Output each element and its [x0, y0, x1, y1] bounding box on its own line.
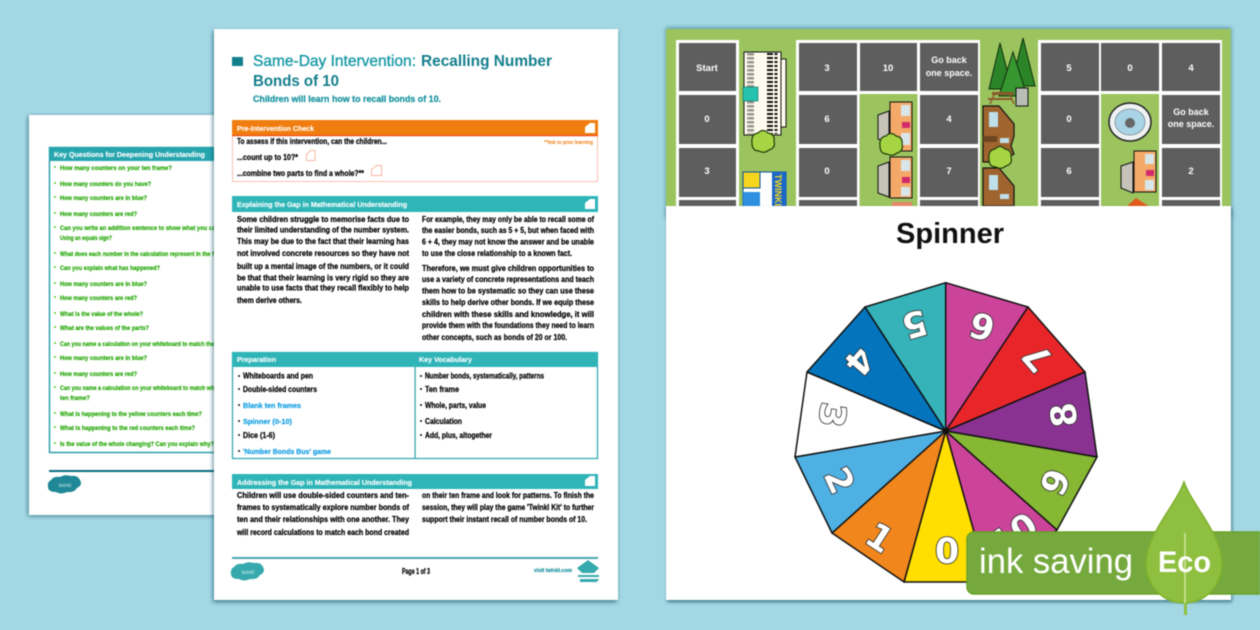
icon: twinkl shop — [743, 172, 786, 209]
key questions list: What is happening to the yellow counters each time? — [60, 411, 202, 418]
panel: preparation and key vocabulary table: Key Vocabulary — [419, 355, 473, 364]
key questions list: How many counters on your ten frame? — [60, 165, 172, 172]
spinner wheel — [795, 283, 1097, 582]
board cell labels: 2 — [1188, 166, 1194, 177]
front page footer: twinkl — [242, 570, 254, 576]
preparation list: Double-sided counters — [243, 385, 318, 394]
vocabulary list — [420, 372, 545, 440]
board cell labels: 5 — [1066, 63, 1072, 74]
panel: pre-intervention check: Pre-Intervention Check — [237, 124, 315, 133]
board cell labels: 6 — [824, 114, 830, 125]
board track strips — [676, 40, 1222, 214]
board cell labels: 3 — [824, 63, 830, 74]
back page footer: twinkl — [59, 483, 71, 489]
panel: pre-intervention check: ...count up to 10?* — [237, 153, 299, 162]
explaining text right column: use a variety of concrete representations and teach — [422, 275, 594, 284]
key questions box: Key Questions for Deepening Understanding — [54, 150, 205, 159]
panel: preparation and key vocabulary table: Preparation — [237, 355, 276, 364]
panel: board game sheet — [666, 29, 1231, 219]
explaining text left column: their limited understanding of the number system. — [237, 226, 409, 234]
page heading: Recalling Number — [421, 53, 552, 70]
key questions list: What is happening to the red counters each time? — [60, 425, 195, 432]
explaining text left column: them derive others. — [237, 296, 302, 305]
preparation list: Dice (1-6) — [243, 431, 275, 440]
key questions list: How many counters are in blue? — [60, 281, 147, 288]
board cell labels: 0 — [704, 114, 710, 125]
explaining text right column: the easier bonds, such as 5 + 5, but when faced with — [422, 226, 594, 235]
key questions list: How many counters are in blue? — [60, 355, 147, 362]
key questions list: How many counters are in blue? — [60, 195, 147, 202]
spinner numbers: 8 — [1043, 400, 1086, 430]
preparation list: Spinner (0-10) — [243, 417, 293, 426]
preparation list — [238, 372, 331, 456]
key questions list: Using an equals sign? — [60, 235, 112, 242]
vocabulary list: Whole, parts, value — [425, 401, 487, 410]
panel: addressing the gap: session, they will play the game 'Twinkl Kit' to further — [422, 503, 594, 512]
panel: addressing the gap: Addressing the Gap in Mathematical Understanding — [237, 478, 412, 487]
explaining text left column: This may be due to the fact that their learning has — [237, 237, 410, 246]
key questions list: What is the value of the whole? — [60, 311, 143, 318]
icon: twinkl shop: TWINKL — [773, 174, 783, 209]
icon: fountain — [1109, 103, 1151, 141]
icon: orange house — [1121, 151, 1156, 207]
explaining text left column — [237, 215, 410, 305]
page heading: Children will learn how to recall bonds of 10. — [253, 94, 441, 104]
explaining text right column: other concepts, such as bonds of 20 or 100. — [422, 333, 567, 342]
explaining text right column: For example, they may only be able to recall some of — [422, 215, 594, 224]
explaining text right column: children with these skills and knowledge, it will — [422, 310, 594, 319]
key questions list: How many counters are red? — [60, 295, 137, 302]
board cell labels: 4 — [946, 114, 952, 125]
panel: explaining the gap — [232, 196, 598, 342]
key questions list: Is the value of the whole changing? Can you explain why? — [60, 441, 214, 448]
key questions list: What are the values of the parts? — [60, 325, 149, 332]
preparation list: Whiteboards and pen — [243, 372, 313, 380]
panel: explaining the gap: Explaining the Gap in Mathematical Understanding — [237, 200, 407, 209]
explaining text right column: provide them with the foundations they need to learn — [422, 321, 594, 330]
key questions list: How many counters are red? — [60, 211, 137, 218]
panel: front worksheet page — [214, 29, 618, 600]
panel: addressing the gap: will record calculations to match each bond created — [236, 528, 409, 537]
board cell labels: 0 — [1066, 114, 1072, 125]
icon: eco leaf — [1146, 482, 1222, 615]
vocabulary list: Ten frame — [425, 385, 460, 394]
page heading: Bonds of 10 — [253, 73, 339, 90]
key questions list: Can you explain what has happened? — [60, 265, 160, 272]
explaining text left column: be that that their learning is very rigid so they are — [237, 274, 410, 282]
panel: spinner sheet — [666, 206, 1231, 600]
preparation list: Blank ten frames — [243, 401, 301, 410]
spinner numbers: 6 — [965, 302, 1000, 348]
panel: back worksheet page — [29, 115, 230, 515]
board cell labels: 3 — [704, 166, 710, 177]
board cell labels: 6 — [1066, 166, 1072, 177]
icon: eco leaf: Eco — [1158, 546, 1211, 579]
key questions list: How many counters are red? — [60, 371, 137, 378]
key questions list: How many counters do you have? — [60, 181, 151, 188]
panel: pre-intervention check: To assess if this intervention, can the children... — [237, 137, 387, 146]
spinner numbers: 3 — [810, 400, 853, 430]
key questions list: Can you name a calculation on your whiteboard to match the frame — [60, 341, 230, 348]
board cell labels: Go back — [931, 55, 968, 65]
icon: terraced houses — [878, 102, 912, 207]
key questions list — [54, 165, 230, 448]
board cell labels: 7 — [946, 166, 952, 177]
board cell labels: one space. — [1168, 119, 1214, 129]
front page footer: visit twinkl.com — [534, 568, 572, 574]
spinner numbers: 9 — [1034, 463, 1080, 502]
page heading — [232, 53, 552, 104]
spinner numbers: 2 — [815, 461, 861, 500]
key questions list: What does each number in the calculation represent in the frame? — [60, 251, 230, 258]
board cell labels: 0 — [1127, 63, 1133, 74]
front page footer: Page 1 of 3 — [402, 567, 430, 576]
spinner numbers: 0 — [935, 532, 959, 572]
back page footer — [48, 470, 219, 494]
panel: addressing the gap — [232, 474, 598, 537]
spinner numbers: 7 — [1015, 334, 1062, 379]
vocabulary list: Calculation — [425, 417, 462, 426]
key questions list: Can you write an addition sentence to show what you can see — [60, 225, 230, 232]
explaining text right column: 6 + 4, they may not know the answer and be unable — [422, 238, 595, 246]
vocabulary list: Number bonds, systematically, patterns — [425, 372, 545, 380]
explaining text left column: not involved concrete resources so they have not — [237, 249, 409, 258]
panel: addressing the gap: support their instant recall of number bonds of 10. — [422, 515, 587, 524]
panel: addressing the gap: Children will use double-sided counters and ten- — [237, 491, 409, 500]
eco ink saving banner — [967, 482, 1260, 615]
spinner numbers: 10 — [983, 506, 1045, 566]
explaining text right column: skills to help derive other bonds. If we equip these — [422, 298, 595, 307]
board cell labels: one space. — [926, 68, 972, 78]
key questions box — [49, 147, 220, 452]
panel: addressing the gap: on their ten frame and look for patterns. To finish the — [422, 491, 595, 500]
explaining text left column: built up a mental image of the numbers, or it could — [237, 262, 409, 271]
panel: addressing the gap: frames to systematically explore number bonds of — [237, 503, 409, 512]
panel: pre-intervention check: **link to prior learning — [544, 140, 593, 146]
explaining text left column: unable to use facts that they recall flexibly to help — [237, 284, 409, 292]
explaining text left column: Some children struggle to memorise facts due to — [237, 215, 409, 224]
board cell labels: 10 — [883, 63, 893, 74]
panel: addressing the gap: ten and their relationships with one another. They — [237, 515, 410, 524]
key questions list: ten frame? — [60, 395, 90, 402]
board cells — [679, 43, 1220, 210]
eco ink saving banner: ink saving — [979, 542, 1133, 581]
spinner numbers: 1 — [858, 515, 900, 562]
icon: brown houses — [983, 106, 1014, 206]
page heading: Same-Day Intervention: — [253, 53, 416, 70]
board cell labels — [696, 55, 1214, 177]
explaining text right column: to use the close relationship to a known fact. — [422, 249, 572, 258]
explaining text right column: them how to be systematic so they can use these — [422, 286, 595, 296]
icon: pine trees and picnic bench — [988, 38, 1035, 106]
vocabulary list: Add, plus, altogether — [425, 431, 492, 440]
key questions list: Can you name a calculation on your whiteboard to match what you — [60, 385, 230, 392]
spinner numbers: 5 — [897, 300, 932, 346]
board cell labels: 0 — [824, 166, 830, 177]
icon: long white building — [743, 52, 786, 152]
panel: pre-intervention check — [232, 120, 598, 182]
panel: pre-intervention check: ...combine two parts to find a whole?** — [237, 169, 365, 178]
panel: preparation and key vocabulary table — [232, 352, 598, 459]
front page footer — [231, 557, 599, 582]
board cell labels: Go back — [1173, 107, 1210, 117]
board cell labels: Start — [696, 63, 719, 74]
spinner heading: Spinner — [896, 218, 1004, 250]
spinner numbers — [810, 300, 1086, 572]
explaining text right column: Therefore, we must give children opportunities to — [422, 264, 594, 273]
explaining text right column — [422, 215, 595, 342]
board cell labels: 4 — [1188, 63, 1194, 74]
preparation list: 'Number Bonds Bus' game — [243, 447, 331, 456]
spinner numbers: 4 — [835, 338, 882, 383]
